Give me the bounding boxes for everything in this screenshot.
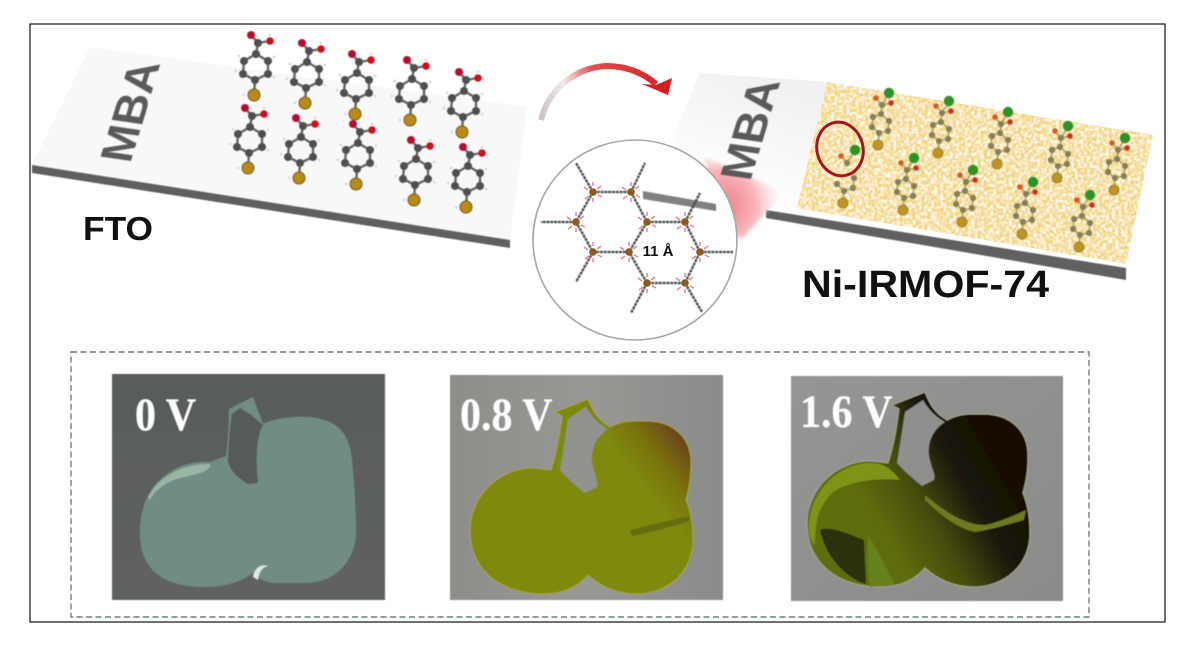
slab top surface — [32, 47, 527, 240]
right slab with Ni-IRMOF-74 film — [672, 73, 1153, 280]
slab edge — [32, 165, 510, 248]
photo: 1.6 V — [791, 376, 1063, 601]
label: FTO: FTO — [83, 210, 153, 247]
photo: 0.8 V — [450, 375, 723, 600]
voltage label 0.8 V: 0.8 V — [460, 388, 553, 441]
device shape 1.6 V — [807, 392, 1030, 587]
dashed frame — [71, 352, 1089, 617]
hexagon framework — [541, 163, 733, 313]
pore size label: 11 Å — [643, 243, 674, 260]
label: Ni-IRMOF-74: Ni-IRMOF-74 — [802, 264, 1049, 306]
curved red arrow — [541, 66, 672, 120]
framework metal nodes — [567, 182, 709, 293]
band seen through lens — [643, 191, 716, 211]
magnified hexagonal pore circle — [533, 140, 737, 340]
dashed panel of photos — [71, 352, 1089, 617]
voltage label 1.6 V: 1.6 V — [800, 385, 893, 438]
red highlight circle — [811, 117, 869, 181]
magnification glow — [704, 157, 785, 240]
left FTO slab with MBA molecules — [32, 31, 527, 248]
yellow MOF film — [797, 82, 1153, 264]
label: MBA right: MBA — [711, 76, 791, 183]
molecules array right — [834, 88, 1130, 252]
device shape 0 V — [140, 397, 356, 587]
right slab top surface — [672, 73, 830, 213]
right slab edge — [766, 210, 1126, 280]
voltage label 0 V: 0 V — [135, 388, 196, 441]
circle lens — [533, 140, 737, 340]
device shape 0.8 V — [470, 399, 693, 594]
photo: 0 V — [112, 374, 385, 600]
label: MBA left: MBA — [91, 58, 171, 165]
molecules array left — [228, 31, 488, 213]
